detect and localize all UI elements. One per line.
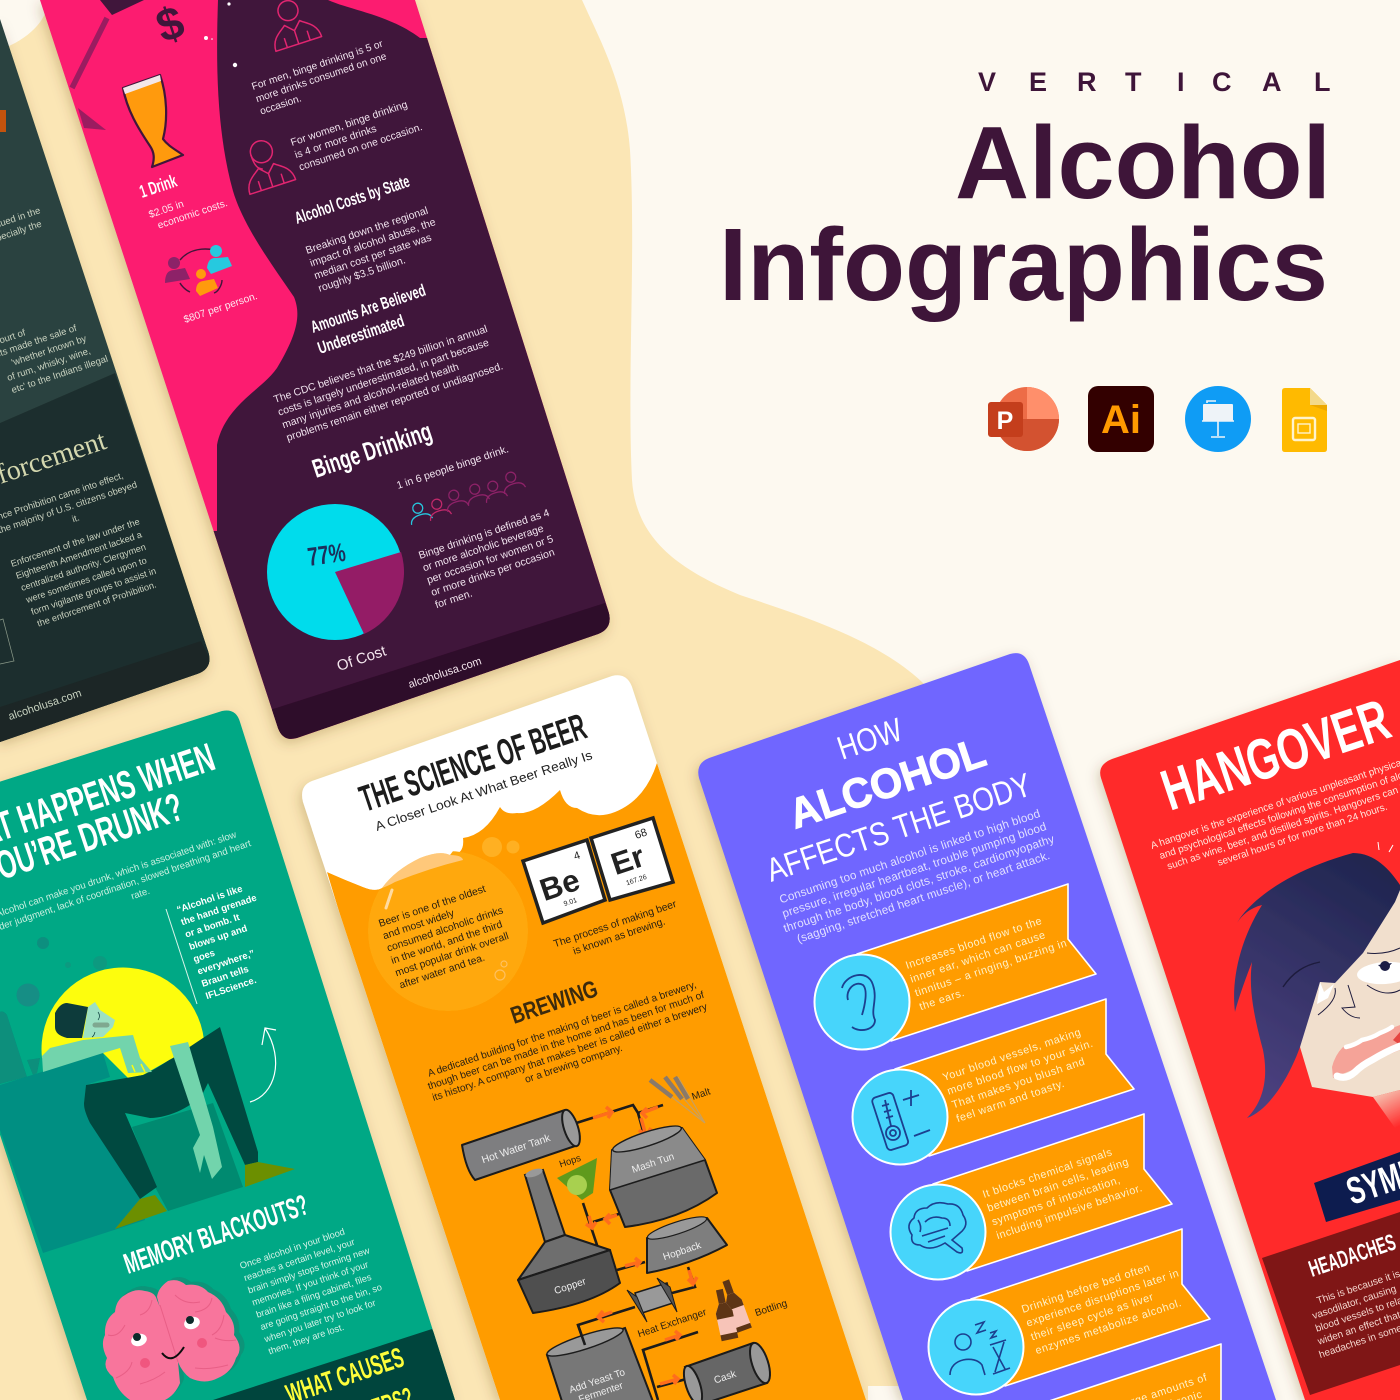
component: heat exchanger: Heat Exchanger — [636, 1307, 709, 1340]
component: cask: Cask — [713, 1368, 739, 1386]
illustration: drunk man — [0, 937, 295, 1253]
text: process of brewing: is known as brewing. — [572, 916, 667, 957]
component: cask — [680, 1341, 774, 1400]
heading: Underestimated: Underestimated — [315, 311, 407, 358]
text: CDC paragraph: costs is largely underestimated, in part because — [276, 337, 491, 419]
footer url: alcoholusa.com — [7, 687, 83, 723]
text: quote: or a bomb. It — [184, 912, 242, 941]
panel: orange science of beer card — [302, 675, 880, 1400]
icon: brain outline — [909, 1203, 966, 1253]
text: quote: “Alcohol is like — [175, 884, 244, 916]
label: Of Cost: Of Cost — [335, 642, 389, 675]
text: binge definition: for men. — [434, 588, 474, 611]
icon: malt: Malt — [690, 1086, 712, 1103]
title: Alcohol: Alcohol — [955, 105, 1331, 220]
text: symptoms of intoxication, — [990, 1174, 1122, 1228]
text: CDC paragraph: many injuries and alcohol-related health — [281, 361, 461, 431]
text: CDC paragraph: The CDC believes that the $249 billion in annual — [272, 323, 489, 406]
text: enzymes metabolize alcohol. — [1034, 1297, 1183, 1357]
text: men binge definition: For men, binge drinking is 5 or — [250, 39, 384, 93]
component: fermenter — [545, 1323, 660, 1400]
panel: headaches — [1262, 1212, 1400, 1395]
heading: HOW: HOW — [832, 710, 907, 767]
tile: Er: 68 — [633, 827, 649, 842]
banner: symptoms — [1314, 1128, 1400, 1222]
text: brewery paragraph: or a brewing company. — [524, 1043, 624, 1086]
text: binge definition: or more alcoholic beverage — [421, 523, 545, 574]
text: regional impact: impact of alcohol abuse, the — [308, 216, 437, 269]
arrows — [586, 1107, 697, 1384]
tile: Be: 4 — [572, 849, 582, 863]
icon: PowerPoint: P — [997, 407, 1013, 435]
icon: Illustrator: Ai — [1101, 398, 1141, 442]
text: memory: reaches a certain level, your — [243, 1237, 356, 1283]
icon: brain character — [103, 1277, 245, 1400]
text: economic cost: $2.05 in — [147, 199, 185, 221]
heading: AFFECTS THE BODY: AFFECTS THE BODY — [761, 766, 1036, 889]
text: brewery paragraph: A dedicated building for the making of beer is called a brewery, — [427, 980, 698, 1080]
panel: pink and purple alcohol cost card — [40, 0, 620, 750]
text: intro: rate. — [130, 886, 151, 902]
heading: Brewing: BREWING — [507, 976, 601, 1030]
text: the ears. — [918, 987, 966, 1013]
icon: man outline — [262, 0, 322, 51]
text: men binge definition: more drinks consumed on one — [255, 51, 388, 105]
pipes — [570, 1105, 698, 1400]
label: bottling: Bottling — [754, 1298, 789, 1319]
icon: woman outline — [235, 134, 296, 194]
icon: Illustrator — [1088, 386, 1154, 452]
text: memory: brain simply stops forming new — [247, 1245, 371, 1295]
text: women binge definition: consumed on one occasion. — [298, 122, 424, 174]
label: 1 Drink: 1 Drink — [137, 171, 180, 202]
text: That makes you blush and — [950, 1056, 1087, 1111]
text: intro: Alcohol can make you drunk, which is associated with: slow — [0, 829, 238, 920]
component: mash tun: Mash Tun — [631, 1151, 676, 1176]
text: binge definition: per occasion for women or 5 — [425, 533, 555, 587]
text: beer description: consumed alcoholic drinks — [386, 905, 505, 955]
text: Increases blood flow to the — [904, 915, 1044, 972]
text: feel warm and toasty. — [955, 1078, 1066, 1125]
component: hopback: Hopback — [662, 1240, 704, 1263]
icon: martini glass — [72, 0, 144, 130]
text: definition: A hangover is the experience of various unpleasant physical — [1149, 757, 1400, 852]
text: beer description: in the world, and the third — [390, 919, 504, 967]
text: quote: IFLScience. — [204, 975, 258, 1002]
panel: red hangover card — [1100, 660, 1400, 1400]
icon: six people row — [406, 469, 526, 525]
text: enforcement paragraph: centralized authority. Clergymen — [20, 542, 147, 593]
text: beer description: and most widely — [382, 908, 456, 942]
tile: Be: Be — [535, 862, 584, 908]
diagram: brewing process — [462, 1077, 789, 1400]
text: their sleep cycle as liver — [1029, 1291, 1155, 1343]
text: memory: memories. If you think of your — [251, 1259, 370, 1308]
text: process of brewing: The process of making beer — [552, 899, 678, 950]
arrow: curved — [250, 1028, 276, 1102]
text: men binge definition: occasion. — [259, 93, 303, 118]
text: more blood flow to your skin. — [946, 1038, 1095, 1098]
text: memory: Once alcohol in your blood — [238, 1226, 346, 1271]
component: mash tun — [610, 1121, 717, 1227]
component: hot water tank — [462, 1108, 584, 1180]
text: memory: them, they are lost. — [267, 1322, 345, 1357]
beer bubble — [368, 851, 528, 1011]
text: economic cost: economic costs. — [156, 198, 229, 232]
divider quote line — [166, 909, 197, 1004]
heading: Amounts Are Believed: Amounts Are Believed — [308, 281, 428, 337]
footer band — [213, 1329, 470, 1400]
text: quote: everywhere,” — [196, 948, 256, 977]
text: women binge definition: For women, binge drinking — [289, 100, 409, 149]
component: copper: Copper — [553, 1276, 588, 1297]
panel: dark green prohibition card — [0, 19, 220, 745]
icon: ear — [842, 975, 875, 1030]
text: women binge definition: is 4 or more drinks — [294, 124, 378, 161]
panel: green what happens when drunk card — [0, 710, 470, 1400]
heading: Alcohol Costs by State: Alcohol Costs by State — [292, 172, 412, 228]
text: intro: through the body, blood clots, stroke, cardiomyopathy — [782, 832, 1056, 935]
text: prohibition paragraph: of rum, whisky, wine, — [6, 346, 92, 384]
component: fermenter: Add Yeast To — [568, 1367, 627, 1396]
tile: Er: 167.26 — [625, 874, 648, 887]
illustration: hungover face — [1234, 842, 1400, 1135]
icon: bottles — [711, 1278, 752, 1341]
text: enforcement paragraph: form vigilante groups to assist in — [30, 566, 157, 617]
text: quote: goes — [192, 948, 216, 965]
icon: thermometer — [871, 1090, 930, 1151]
text: binge definition: or more drinks per occasion — [430, 546, 556, 599]
text: intro: pressure, irregular heartbeat, trouble pumping blood — [781, 820, 1048, 920]
text: Drinking before bed often — [1020, 1262, 1152, 1316]
text: brewery paragraph: its history. A company that makes beer is called either a brewery — [431, 1001, 710, 1104]
icon: Keynote — [1185, 386, 1251, 452]
text: inner ear, which can cause — [909, 929, 1047, 986]
text: brewery paragraph: though beer can be made in the home and has been for much of — [427, 990, 706, 1093]
icon: PowerPoint — [988, 387, 1059, 451]
text: per person: $807 per person. — [182, 291, 259, 326]
text: beer description: after water and tea. — [398, 953, 486, 991]
text: regional impact: roughly $3.5 billion. — [317, 254, 407, 295]
tile: Er: Er — [607, 838, 649, 882]
footer url: alcoholusa.com — [407, 655, 483, 691]
text: experience disruptions later in — [1025, 1267, 1181, 1330]
text: It blocks chemical signals — [981, 1146, 1114, 1201]
component: hopback — [646, 1213, 727, 1273]
component: copper — [518, 1167, 620, 1313]
component: hot water tank: Hot Water Tank — [480, 1132, 553, 1166]
text: quote: Braun tells — [200, 964, 250, 990]
tile: Be — [523, 840, 605, 923]
icon: sleep — [950, 1322, 1010, 1375]
text: including impulsive behavior. — [995, 1182, 1144, 1242]
text: 1 in 6: 1 in 6 people binge drink. — [395, 443, 510, 492]
text: enforcement paragraph: were sometimes called upon to — [24, 555, 148, 605]
icon: beer glass — [123, 75, 183, 167]
text: beer description: most popular drink overall — [394, 931, 510, 979]
title: Infographics: Infographics — [719, 207, 1328, 322]
icon: malt — [650, 1077, 712, 1123]
component: hops — [557, 1153, 597, 1200]
icon: three people cycle — [165, 245, 232, 296]
text: enforcement paragraph: the enforcement of Prohibition. — [36, 579, 158, 629]
component: heat exchanger — [627, 1278, 709, 1340]
text: between brain cells, leading — [986, 1156, 1131, 1215]
text: memory: when you later try to look for — [262, 1298, 377, 1345]
panel: headaches: widen an effect that — [1316, 1310, 1400, 1348]
component: hops: Hops — [558, 1153, 583, 1170]
text: CDC paragraph: problems remain either reported or undiagnosed. — [285, 360, 505, 444]
subheading: A Closer Look At What Beer Really Is — [373, 747, 595, 834]
chart: pie 77% — [267, 504, 404, 640]
text: tinnitus – a ringing, buzzing in — [913, 937, 1069, 999]
frame — [0, 619, 14, 664]
text: regional impact: median cost per state was — [313, 232, 433, 282]
heading: ALCOHOL: ALCOHOL — [783, 728, 991, 838]
text: quote: blows up and — [188, 923, 249, 953]
text: enforcement paragraph: Enforcement of the law under the — [9, 516, 141, 569]
text: binge definition: Binge drinking is defined as 4 — [417, 507, 551, 562]
text: prohibition paragraph: etc' to the Indians illegal — [10, 354, 110, 396]
text: memory: brain like a filing cabinet, files — [255, 1272, 373, 1320]
decorative dots — [204, 2, 237, 67]
text: intro: (sagging, stretched heart muscle), or heart attack. — [795, 849, 1052, 946]
banner 4: sleep — [928, 1229, 1210, 1394]
text: regional impact: Breaking down the regional — [304, 205, 430, 257]
banner 5 — [1010, 1344, 1221, 1400]
banner 3: brain — [890, 1114, 1172, 1280]
text: quote: the hand grenade — [180, 893, 258, 928]
text: Your blood vessels, making — [941, 1026, 1083, 1084]
chart: pie 77%: 77% — [306, 537, 347, 572]
heading: vertical: VERTICAL — [978, 67, 1330, 97]
tile: Er — [591, 818, 673, 900]
text: memory: are going straight to the bin, so — [259, 1282, 383, 1332]
banner 2: temperature — [852, 999, 1134, 1164]
heading: Binge Drinking: Binge Drinking — [308, 416, 435, 484]
text: enforcement intro: the majority of U.S. citizens obeyed — [0, 480, 138, 535]
text: intro: Consuming too much alcohol is linked to high blood — [778, 807, 1042, 906]
icon: Google Slides — [1282, 388, 1327, 452]
text: enforcement intro: it. — [71, 513, 81, 524]
banner 1: ear — [814, 884, 1096, 1050]
tile: Be: 9.01 — [563, 897, 578, 908]
panel: purple how alcohol affects the body card — [698, 653, 1276, 1400]
panel: headaches: vasodilator, causing — [1311, 1284, 1398, 1322]
text: definition: several hours or for more than 24 hours. — [1216, 802, 1389, 869]
heading: memory blackouts: MEMORY BLACKOUTS? — [120, 1189, 312, 1281]
heading: the science of beer: THE SCIENCE OF BEER — [355, 706, 591, 820]
text: beer description: Beer is one of the oldest — [377, 884, 487, 930]
text: enforcement paragraph: Eighteenth Amendment lacked a — [15, 529, 144, 581]
text: prohibition paragraph: 'whether known by — [10, 333, 88, 369]
